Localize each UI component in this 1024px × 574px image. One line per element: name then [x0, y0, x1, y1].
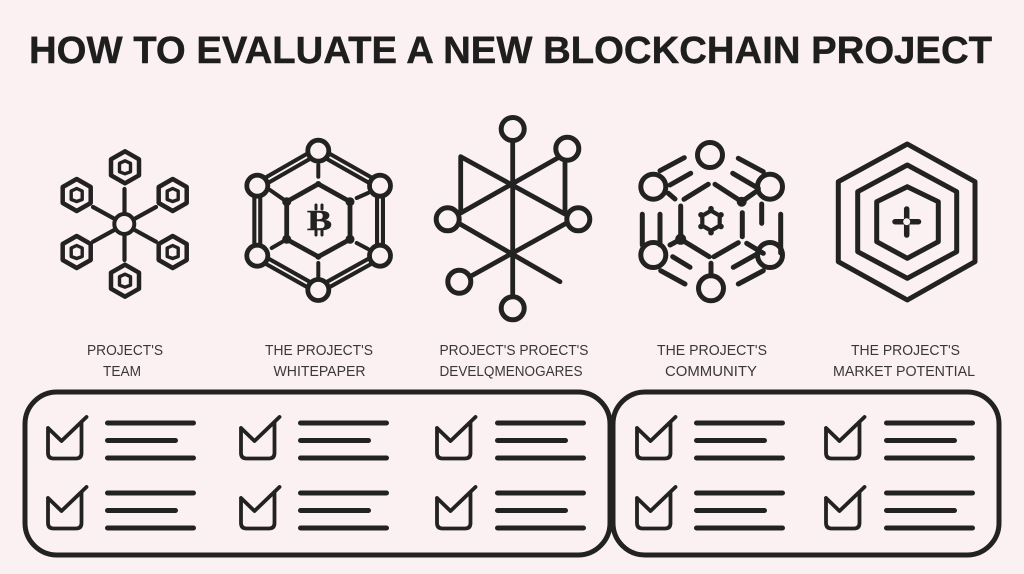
label: project's development [440, 343, 588, 380]
label: project's team: TEAM [103, 364, 141, 380]
label: the project's community: COMMUNITY [665, 364, 757, 380]
panel: left checklist [25, 392, 610, 555]
panel: right checklist [613, 392, 999, 555]
label: project's team [87, 343, 163, 380]
checklist items, third column [437, 417, 584, 528]
checklist items, first column [48, 417, 194, 528]
icon: bitcoin symbol: B [307, 206, 332, 237]
label: the project's whitepaper: THE PROJECT'S [265, 343, 373, 359]
label: project's development: PROJECT'S PROECT'S [440, 343, 588, 359]
label: the project's whitepaper: WHITEPAPER [274, 364, 366, 380]
icon: community network [641, 142, 782, 301]
icon: project team network [63, 151, 187, 297]
checklist items, fourth column [637, 417, 782, 528]
label: the project's market potential: THE PROJECT'S [851, 343, 960, 359]
label: project's development: DEVELQMENOGARES [440, 364, 582, 380]
label: the project's market potential [833, 343, 975, 380]
icon: whitepaper bitcoin hexagon [247, 140, 390, 300]
label: the project's market potential: MARKET POTENTIAL [833, 364, 975, 380]
label: the project's whitepaper [265, 343, 373, 380]
label: project's team: PROJECT'S [87, 343, 163, 359]
checklist items, fifth column [826, 417, 972, 528]
checklist items, second column [241, 417, 386, 528]
label: the project's community: THE PROJECT'S [657, 343, 767, 359]
label: the project's community [657, 343, 767, 380]
icon: market potential concentric hexagons [838, 144, 975, 300]
icon: development star network [436, 118, 590, 320]
title: HOW TO EVALUATE A NEW BLOCKCHAIN PROJECT [29, 30, 992, 72]
